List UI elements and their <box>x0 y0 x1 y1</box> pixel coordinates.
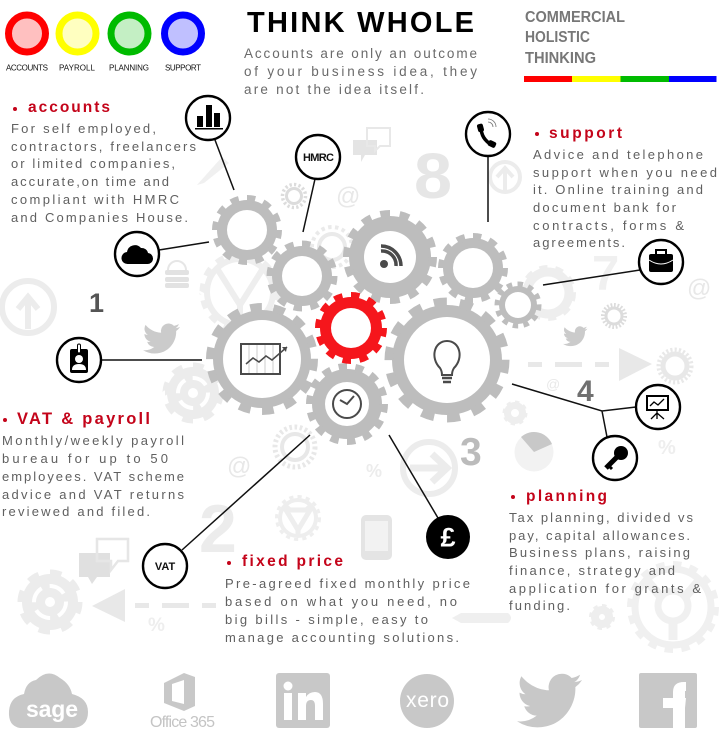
faint at signs: @ <box>546 376 560 392</box>
icon: pound: £ <box>440 522 456 552</box>
logo: twitter <box>517 674 582 727</box>
pie chart <box>514 432 554 472</box>
twitter bird small left <box>143 323 180 353</box>
icon: line chart <box>241 344 287 374</box>
background watermark icons <box>2 128 716 650</box>
faint percent right: % <box>658 437 676 459</box>
brand tagline: THINKING <box>525 50 596 67</box>
text: fixed price <box>225 576 470 645</box>
icon: HMRC <box>296 135 340 179</box>
twitter bird small right <box>563 326 587 346</box>
text: support <box>533 147 717 250</box>
faint speech bubbles top <box>353 128 390 162</box>
text: accounts: and Companies House. <box>11 210 188 225</box>
subtitle <box>244 46 477 97</box>
text: VAT and payroll: bureau for up to 50 <box>2 451 168 466</box>
text: planning: Tax planning, divided vs <box>509 510 694 525</box>
text: support: document bank for <box>533 200 677 215</box>
panel: fixed price <box>225 553 470 645</box>
number 4: 4 <box>577 375 594 408</box>
gear right <box>442 236 504 300</box>
text: support: it. Online training and <box>533 182 703 197</box>
logo: sage: sage <box>26 696 78 722</box>
logo: xero: xero <box>406 689 449 712</box>
legend: planning <box>109 15 149 72</box>
text: accounts: or limited companies, <box>11 156 175 171</box>
gear small right <box>497 284 539 326</box>
icon: cloud <box>115 232 159 276</box>
legend: accounts: ACCOUNTS <box>6 64 48 72</box>
colour bar <box>524 76 716 82</box>
icon: key <box>593 436 637 480</box>
gear second <box>270 244 334 308</box>
icon: bar chart <box>186 96 230 140</box>
icon: light bulb <box>434 341 460 382</box>
faint pencil <box>197 157 229 185</box>
text: support: contracts, forms & <box>533 218 684 233</box>
text: fixed price: based on what you need, no <box>225 594 457 609</box>
text: VAT and payroll: reviewed and filed. <box>2 504 150 519</box>
faint percent centre: % <box>366 461 382 481</box>
faint dashed arrow left <box>92 589 216 622</box>
legend: payroll <box>59 15 96 72</box>
gear chart <box>210 307 314 411</box>
faint lock <box>165 261 189 288</box>
faint ring gear centre <box>312 227 352 267</box>
heading: support: support <box>549 125 622 142</box>
brand tagline: COMMERCIAL <box>525 9 625 26</box>
text: support: support when you need <box>533 165 717 180</box>
faint gear lower left <box>20 572 80 632</box>
faint number 7: 7 <box>592 247 619 301</box>
faint circle arrow left <box>2 281 54 333</box>
faint gear left <box>165 365 221 421</box>
subtitle: are not the idea itself. <box>244 82 424 97</box>
faint circle arrow top right <box>490 162 520 192</box>
faint dashed arrow right <box>528 348 652 381</box>
faint pencil lower <box>452 613 511 623</box>
text: planning <box>509 510 701 613</box>
subtitle: Accounts are only an outcome <box>244 46 477 61</box>
faint circle arrow lower <box>403 442 455 494</box>
icon: rss <box>380 246 401 268</box>
icon: HMRC: HMRC <box>303 152 334 164</box>
text: support: Advice and telephone <box>533 147 703 162</box>
gear rss <box>347 214 433 300</box>
icon: phone <box>466 112 510 156</box>
faint at signs: @ <box>227 453 251 480</box>
text: planning: application for grants & <box>509 581 701 596</box>
heading: planning: planning <box>526 488 607 505</box>
faint speech bubbles left <box>79 539 128 584</box>
text: fixed price: manage accounting solutions. <box>225 630 459 645</box>
gear bulb <box>389 302 505 418</box>
faint percent lower left: % <box>148 615 165 636</box>
heading: fixed price: fixed price <box>242 553 343 570</box>
text: planning: finance, strategy and <box>509 563 675 578</box>
icon circles <box>57 96 683 588</box>
logo: linkedin <box>276 673 330 728</box>
faint ring gear <box>282 184 306 208</box>
gear clock <box>310 367 384 441</box>
panel: support <box>533 125 717 250</box>
panel: VAT and payroll <box>2 410 185 519</box>
legend: payroll: PAYROLL <box>59 64 96 72</box>
logo: xero <box>400 674 454 728</box>
faint at signs <box>227 183 711 480</box>
gear top left <box>216 198 278 262</box>
text: accounts <box>11 121 196 225</box>
logo: office 365: Office 365 <box>150 714 215 731</box>
brand tagline: HOLISTIC <box>525 29 590 46</box>
icon: briefcase <box>639 240 683 284</box>
faint number 8: 8 <box>414 140 452 212</box>
heading: accounts: accounts <box>28 99 110 116</box>
text: planning: Business plans, raising <box>509 545 690 560</box>
icon: VAT: VAT <box>155 561 175 573</box>
text: accounts: accurate,on time and <box>11 174 169 189</box>
text: VAT and payroll: employees. VAT scheme <box>2 469 184 484</box>
faint big gear lower right <box>630 564 716 650</box>
text: accounts: For self employed, <box>11 121 156 136</box>
text: fixed price: Pre-agreed fixed monthly price <box>225 576 470 591</box>
faint wheel gear behind gears <box>202 254 278 330</box>
legend: accounts <box>6 15 48 72</box>
text: VAT and payroll <box>2 433 185 519</box>
text: fixed price: big bills - simple, easy to <box>225 612 428 627</box>
text: planning: funding. <box>509 598 570 613</box>
text: VAT and payroll: advice and VAT returns <box>2 487 185 502</box>
faint number 2: 2 <box>199 491 237 567</box>
legend: support: SUPPORT <box>165 64 201 72</box>
faint at signs: @ <box>687 275 711 302</box>
logo: office 365 <box>150 673 215 731</box>
text: support: agreements. <box>533 235 625 250</box>
legend <box>6 15 202 72</box>
connector lines <box>101 140 640 550</box>
icon: clock <box>333 390 361 418</box>
red centre gear <box>318 296 384 360</box>
gear cluster <box>210 198 539 441</box>
subtitle: of your business idea, they <box>244 64 477 79</box>
icon: VAT <box>143 544 187 588</box>
faint wheel gear lower <box>276 496 320 540</box>
number 1: 1 <box>89 288 104 318</box>
partner logos <box>9 673 697 731</box>
legend: planning: PLANNING <box>109 64 149 72</box>
text: planning: pay, capital allowances. <box>509 528 690 543</box>
faint ring gear right <box>603 305 625 327</box>
logo: facebook <box>639 673 697 728</box>
faint gear right <box>522 267 574 319</box>
text: accounts: compliant with HMRC <box>11 192 179 207</box>
faint tablet <box>361 515 392 560</box>
brand tagline <box>525 9 625 67</box>
icon: presentation <box>636 385 680 429</box>
text: VAT and payroll: Monthly/weekly payroll <box>2 433 184 448</box>
faint small gear lower <box>504 402 526 424</box>
faint ring gear lower <box>275 427 315 467</box>
text: accounts: contractors, freelancers <box>11 139 196 154</box>
heading: VAT and payroll: VAT & payroll <box>17 410 150 428</box>
faint small gear lower right <box>590 606 614 628</box>
faint ring gear far right <box>658 350 692 382</box>
logo: sage <box>9 673 88 728</box>
legend: support <box>164 15 202 72</box>
panel: planning <box>509 488 701 613</box>
title: THINK WHOLE <box>247 7 474 39</box>
faint at signs: @ <box>336 183 360 210</box>
number 3: 3 <box>460 431 482 474</box>
panel: accounts <box>11 99 196 225</box>
icon: id badge <box>57 338 101 382</box>
icon: pound <box>426 515 470 559</box>
